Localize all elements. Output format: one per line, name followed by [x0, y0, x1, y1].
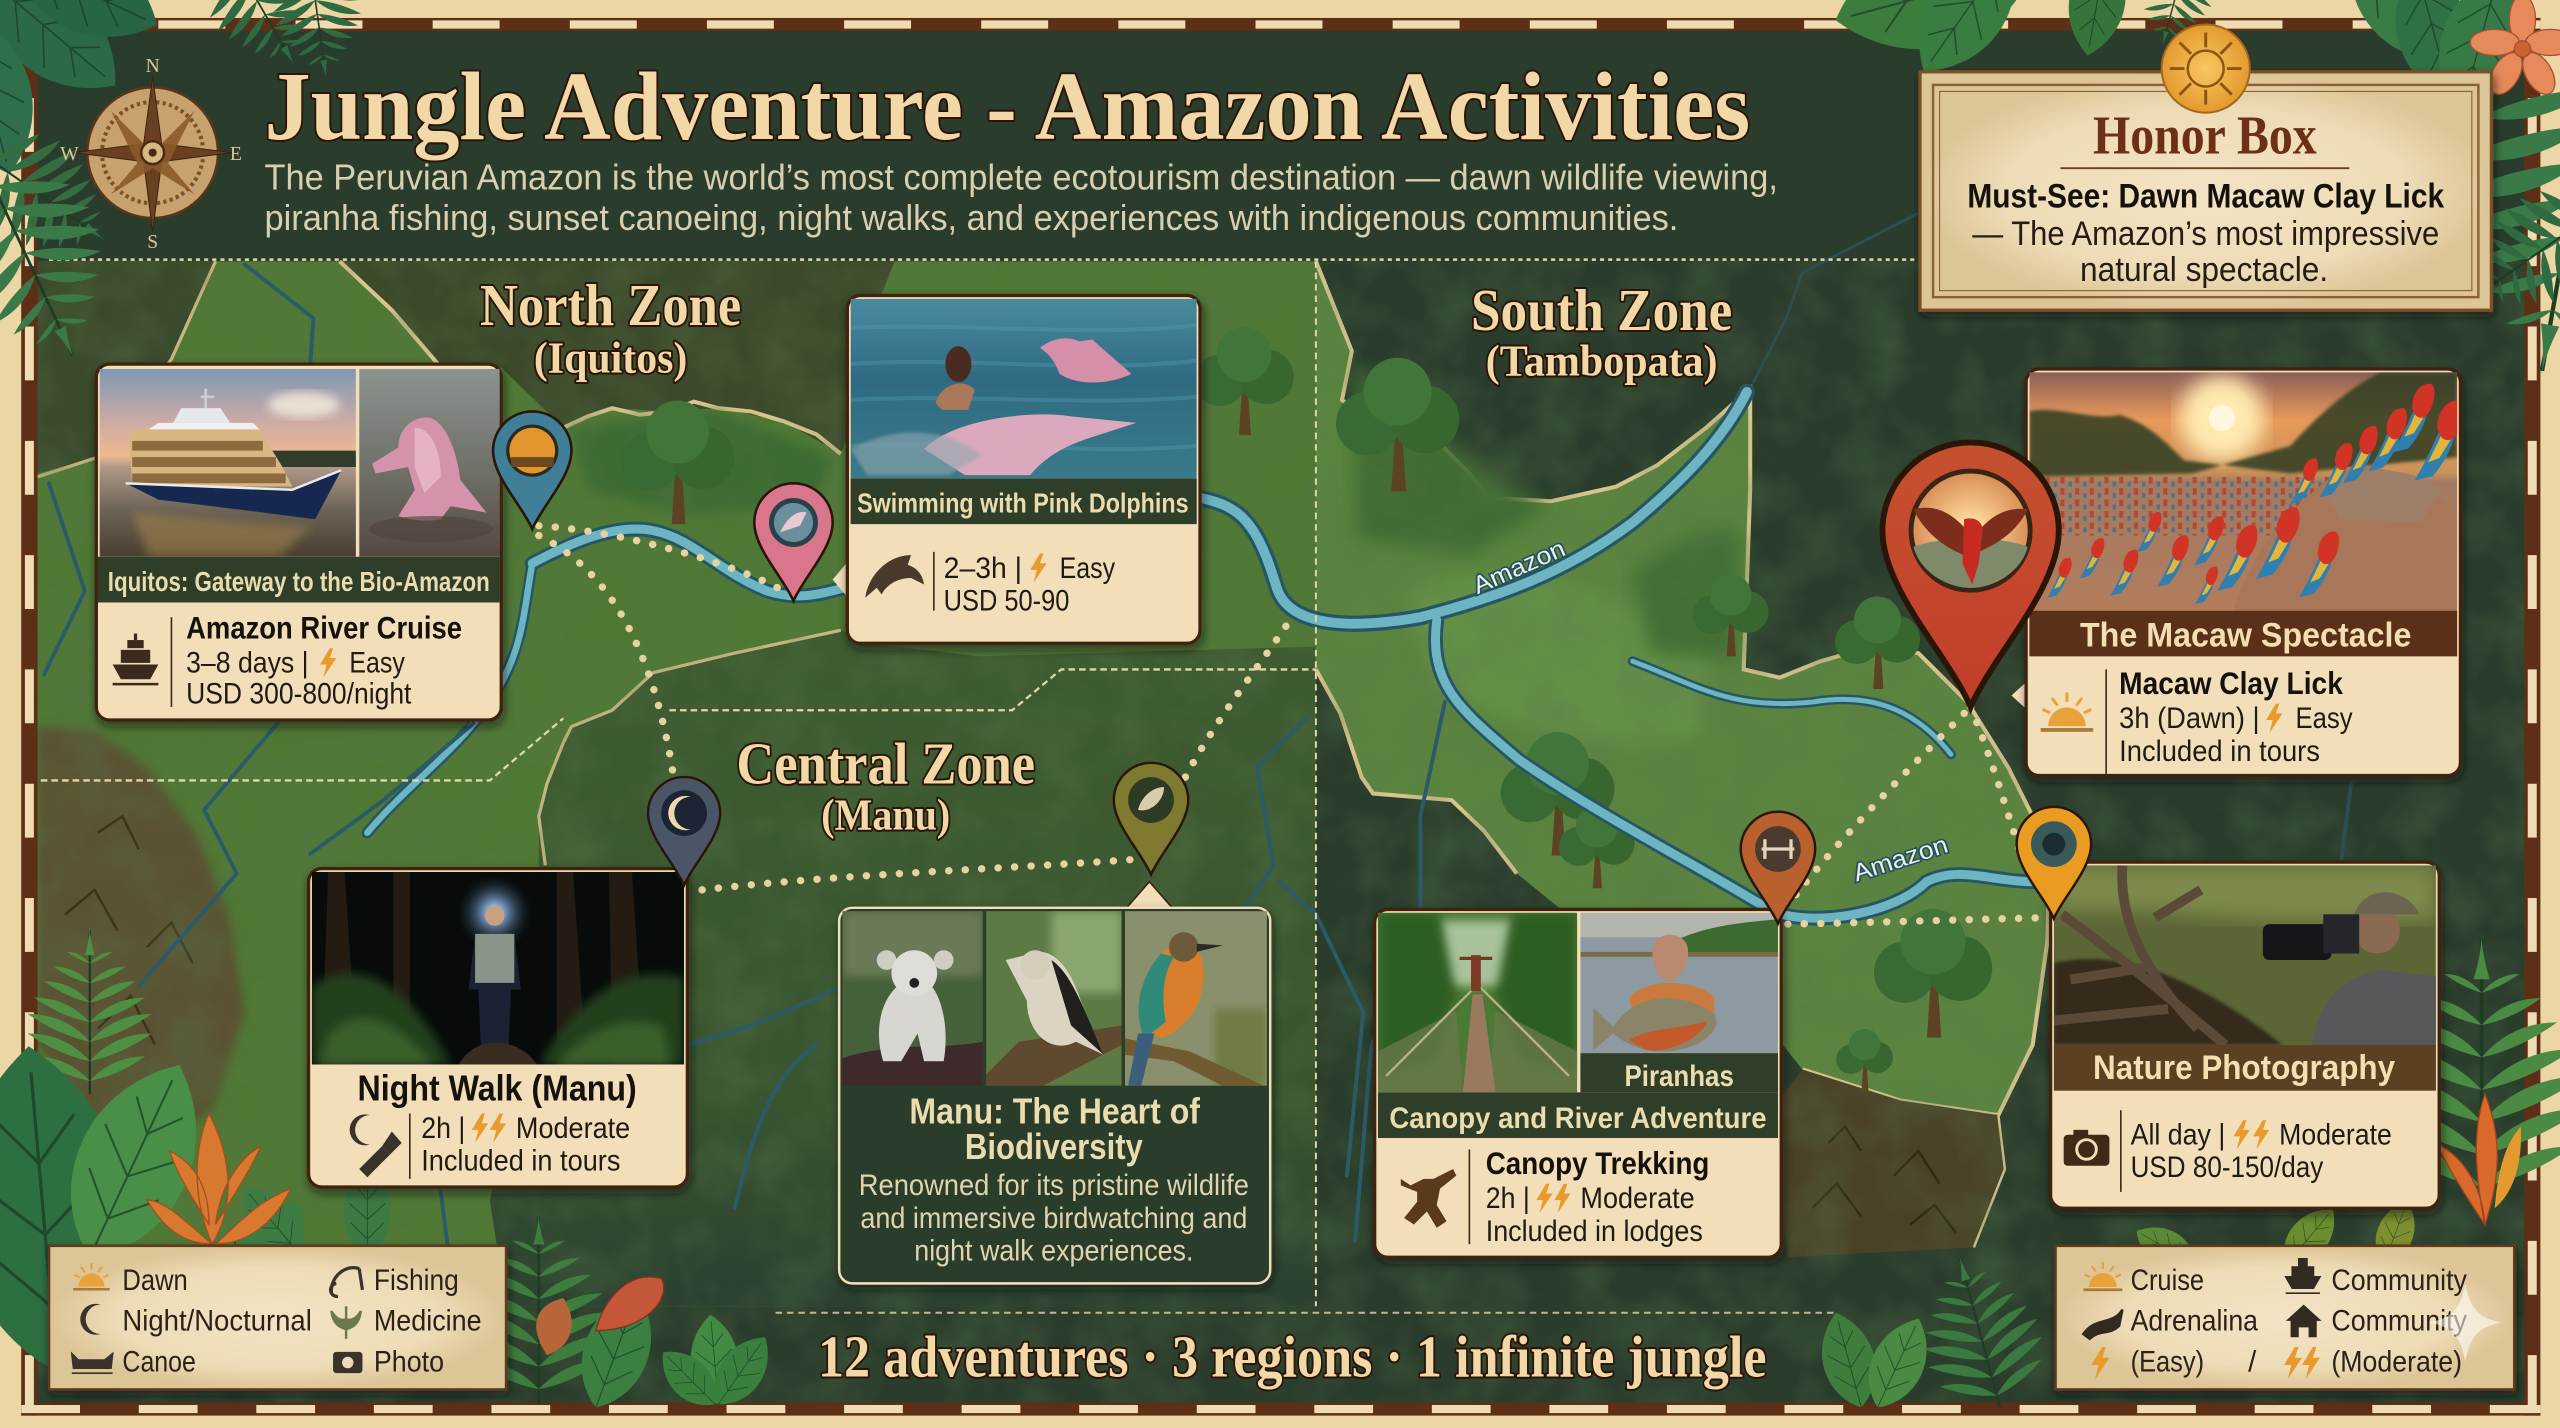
caption: Piranhas: Piranhas [1624, 1060, 1734, 1093]
subtitle [264, 156, 1778, 238]
card heading: Manu: The Heart of [909, 1090, 1201, 1131]
card text: night walk experiences. [914, 1234, 1193, 1267]
card text: and immersive birdwatching and [860, 1202, 1247, 1235]
card text: Canopy Trekking [1486, 1146, 1709, 1181]
icon: sun medallion [2162, 24, 2250, 113]
card text: All day | [2131, 1119, 2225, 1152]
region divider lines [41, 260, 1918, 1313]
panel: legend right [2056, 1246, 2514, 1389]
photo: white and black bird [986, 911, 1122, 1086]
legend labels: first column: (Easy) [2131, 1346, 2204, 1379]
card text [859, 1169, 1249, 1267]
heading: Central Zone [736, 732, 1035, 839]
icon: dolphin [865, 555, 924, 598]
legend labels: first column: Cruise [2131, 1264, 2204, 1297]
card: Nature Photography [2051, 862, 2439, 1208]
card text: Included in tours [421, 1145, 620, 1178]
compass rose [73, 77, 232, 232]
honor box text: natural spectacle. [2080, 251, 2328, 289]
river labels: Amazon [1850, 831, 1951, 887]
icon: moon and flashlight [350, 1114, 402, 1177]
card: Canopy and River Adventure [1375, 909, 1781, 1257]
card heading: Biodiversity [965, 1126, 1143, 1167]
icon: dawn [73, 1263, 110, 1291]
photo: macaw spectacle [2029, 372, 2458, 610]
foliage: top right [1822, 0, 2560, 397]
card text [2131, 1119, 2392, 1184]
card text: Easy [1060, 552, 1115, 585]
icon: cruise [2083, 1262, 2122, 1291]
card text: USD 300-800/night [186, 678, 411, 711]
card text: USD 80-150/day [2131, 1151, 2324, 1184]
compass letters: E [230, 144, 242, 165]
panel: honor box [1920, 24, 2491, 310]
icon: camera [2064, 1130, 2109, 1166]
map pin: night walk [648, 777, 720, 885]
card text: Amazon River Cruise [186, 610, 462, 645]
legend labels: second column: Photo [374, 1346, 444, 1379]
photo: canopy bridge [1378, 912, 1578, 1092]
card text [2119, 666, 2353, 768]
map pin: dolphins [754, 483, 833, 601]
dotted adventure routes [539, 526, 2051, 924]
caption: Nature Photography [2093, 1049, 2395, 1087]
card text: 2–3h | [944, 552, 1022, 585]
card text: Macaw Clay Lick [2119, 666, 2344, 701]
foliage: bottom centre [467, 1213, 783, 1418]
card text: Moderate [2279, 1119, 2392, 1152]
icon: moderate bolts [2284, 1347, 2320, 1379]
legend labels: second column: Fishing [374, 1264, 459, 1297]
photo: night walk [312, 872, 684, 1064]
map pin: photography [2017, 807, 2091, 919]
honor box text: — The Amazon’s most impressive [1972, 215, 2439, 253]
caption: Swimming with Pink Dolphins [857, 488, 1189, 519]
photo: swimming with dolphins [850, 298, 1197, 478]
river labels: Amazon [1469, 535, 1569, 600]
photo: colourful bird [1125, 911, 1267, 1086]
icon: medicine [331, 1306, 361, 1339]
photo: white mammal [842, 911, 983, 1086]
icon: trekker [1401, 1169, 1456, 1228]
card text: Renowned for its pristine wildlife [859, 1169, 1249, 1202]
legend labels: second column: Medicine [374, 1305, 482, 1338]
panel: legend left [49, 1246, 506, 1389]
card text: 3h (Dawn) | [2119, 702, 2260, 735]
title: Jungle Adventure - Amazon Activities [264, 53, 1750, 161]
heading: South Zone [1471, 278, 1732, 386]
card text: 3–8 days | [186, 647, 309, 680]
card heading [909, 1090, 1201, 1167]
icon: orange flower [2470, 0, 2560, 100]
legend labels: second column [2331, 1264, 2467, 1379]
icon: dawn sun [2041, 692, 2093, 732]
heading: Central Zone: Central Zone [736, 732, 1035, 797]
subtitle: piranha fishing, sunset canoeing, night walks, and experiences with indigenous communities. [264, 197, 1678, 238]
card: Amazon River Cruise [96, 364, 501, 720]
card text: Included in lodges [1486, 1215, 1703, 1248]
icon: photo [333, 1352, 362, 1373]
card text: USD 50-90 [944, 585, 1069, 618]
card text: Included in tours [2119, 735, 2320, 768]
card: Night Walk [309, 869, 687, 1187]
icon: night [80, 1304, 100, 1335]
photo: wildlife photographer [2054, 865, 2436, 1045]
heading: North Zone: North Zone [480, 273, 741, 338]
foliage: bottom left [0, 927, 391, 1379]
honor box heading: Honor Box [2093, 105, 2317, 166]
honor box text [1967, 177, 2445, 289]
icon: ship [113, 634, 158, 684]
map: land regions [38, 261, 2524, 1404]
compass letters: N [146, 56, 160, 77]
caption: Canopy and River Adventure [1389, 1102, 1767, 1135]
photo: cruise ship [100, 369, 356, 557]
legend labels: first column: Dawn [122, 1264, 188, 1297]
legend labels: first column: Night/Nocturnal [122, 1305, 312, 1338]
legend labels: first column: Canoe [122, 1346, 196, 1379]
card text: Moderate [1580, 1182, 1695, 1215]
heading: South Zone: South Zone [1471, 278, 1732, 343]
river labels [1469, 535, 1951, 887]
heading: North Zone: (Iquitos) [534, 333, 687, 382]
card: Swimming with Pink Dolphins [833, 296, 1200, 643]
heading: South Zone: (Tambopata) [1486, 337, 1718, 386]
legend labels: second column: (Moderate) [2331, 1346, 2462, 1379]
icon: adrenaline [2083, 1309, 2122, 1339]
icon: community ship [2286, 1259, 2320, 1293]
tagline: 12 adventures · 3 regions · 1 infinite jungle [818, 1324, 1767, 1389]
compass letters: W [60, 144, 79, 165]
legend labels: first column [122, 1264, 312, 1379]
card text [186, 610, 462, 711]
card text [944, 552, 1115, 618]
card heading: Night Walk (Manu) [358, 1067, 637, 1108]
map pin: macaw clay lick [1882, 442, 2059, 707]
legend labels: first column: / [2248, 1346, 2257, 1379]
legend labels: first column: Adrenalina [2131, 1305, 2259, 1338]
card text [1486, 1146, 1709, 1248]
caption: Iquitos: Gateway to the Bio-Amazon [108, 566, 490, 597]
map pin: canopy [1741, 812, 1815, 923]
card text [421, 1112, 630, 1178]
legend labels: second column: Community [2331, 1305, 2467, 1338]
map pin: sunset cruise [493, 411, 571, 529]
honor box text: Must-See: Dawn Macaw Clay Lick [1967, 177, 2445, 215]
photo: pink dolphin [359, 369, 500, 557]
map: Amazon rivers [44, 214, 2351, 1257]
legend labels: first column [2131, 1264, 2259, 1379]
compass letters: S [147, 232, 158, 253]
foliage: top left [0, 0, 369, 393]
map pin: birdwatching [1114, 763, 1188, 874]
icon: canoe [72, 1354, 113, 1373]
heading: Central Zone: (Manu) [821, 790, 950, 839]
foliage: bottom right [1811, 933, 2560, 1423]
legend labels: second column [374, 1264, 482, 1379]
card text: 2h | [1486, 1182, 1530, 1215]
card: Manu biodiversity [839, 882, 1270, 1283]
subtitle: The Peruvian Amazon is the world’s most complete ecotourism destination — dawn wildlife viewing, [264, 156, 1778, 197]
map: trees [621, 327, 1992, 1091]
caption: The Macaw Spectacle [2080, 617, 2411, 655]
card text: Moderate [516, 1112, 630, 1145]
heading: North Zone [480, 273, 741, 382]
icon: easy bolt [2091, 1347, 2109, 1379]
photo: piranha catch [1580, 912, 1778, 1053]
sparkle [2429, 1283, 2501, 1362]
compass letters [60, 56, 242, 253]
card text: 2h | [421, 1112, 465, 1145]
card text: Easy [2296, 702, 2353, 735]
card: Macaw Clay Lick [2011, 369, 2463, 776]
icon: fishing [331, 1268, 362, 1296]
icon: community house [2286, 1305, 2322, 1337]
card text: Easy [349, 647, 405, 680]
legend labels: second column: Community [2331, 1264, 2467, 1297]
